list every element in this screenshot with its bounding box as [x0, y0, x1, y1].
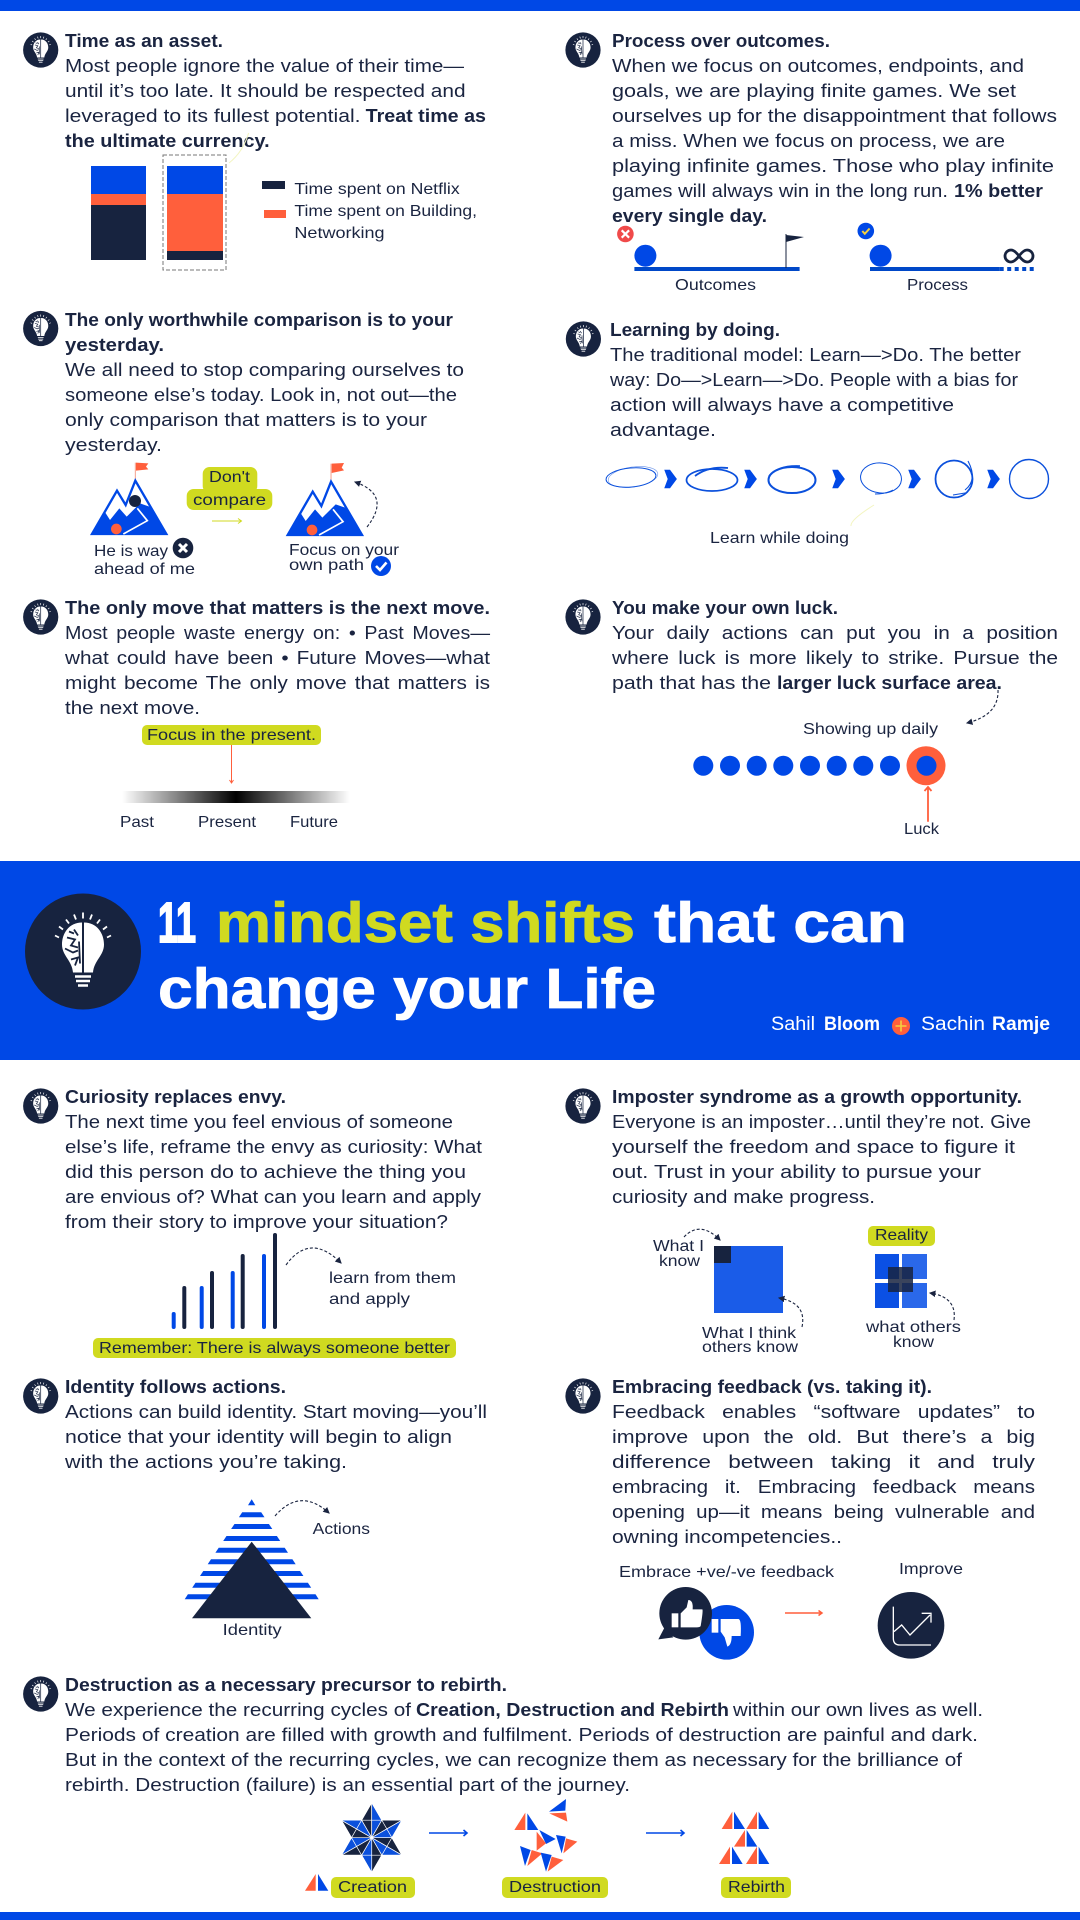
body text: feedback: embracing it. Embracing feedback means [612, 1476, 1035, 1497]
caption: identity: Identity [223, 1622, 282, 1639]
body text: process: every single day. [612, 205, 767, 226]
legend: Time spent on Building, [294, 203, 477, 220]
panel: the next move [23, 597, 491, 831]
arrow: dashed to learn [286, 1248, 341, 1265]
body text: learning [609, 344, 1021, 440]
body text: identity: Actions can build identity. Start moving—you’ll [65, 1401, 487, 1422]
icon: lightbulb badge [23, 1378, 58, 1414]
diagram: sketched circles improving [605, 460, 1048, 498]
body text: feedback: Feedback enables “software updates” to [612, 1401, 1035, 1422]
arrow: creation to destruction [429, 1830, 467, 1836]
body text: next move [64, 622, 491, 718]
body text: process: playing infinite games. Those who play infinite [612, 155, 1054, 176]
diagram: reality squares [865, 1226, 961, 1351]
icon: growth chart [878, 1592, 944, 1659]
body text: learning: advantage. [610, 419, 716, 440]
icon: lightbulb badge [565, 32, 601, 68]
arrow: feedback to improve [785, 1610, 822, 1616]
diagram: reality squares: know [893, 1334, 934, 1351]
heading: imposter: Imposter syndrome as a growth opportunity. [612, 1086, 1022, 1107]
bar chart: rising lines [174, 1235, 275, 1327]
top bar [0, 0, 1080, 11]
body text: luck: where luck is more likely to strike. Pursue the [611, 647, 1058, 668]
label: rebirth: Rebirth [728, 1879, 785, 1896]
body text: destruction: Periods of creation are filled with growth and fulfilment. Periods of destruction are painful and dark. [65, 1724, 978, 1745]
body text: feedback: owning incompetencies.. [612, 1526, 842, 1547]
body text: luck: path that has the [612, 672, 771, 693]
dots chart: luck surface [693, 746, 946, 785]
authors [771, 1014, 1050, 1035]
body text: process: 1% better [954, 180, 1043, 201]
panel: time as an asset [23, 30, 486, 270]
body text: time: until it’s too late. It should be respected and [65, 80, 466, 101]
legend: Networking [294, 225, 385, 242]
body text: process: goals, we are playing finite games. We set [612, 80, 1016, 101]
callout: don't compare [187, 467, 272, 524]
diagram: outcomes track [617, 226, 804, 294]
body text: time [65, 55, 486, 151]
icon: lightbulb badge [565, 599, 601, 635]
caption: showing up daily: Showing up daily [803, 721, 938, 738]
authors: Ramje [992, 1014, 1050, 1035]
diagram: what I know square [653, 1229, 803, 1356]
heading: luck: You make your own luck. [612, 597, 838, 618]
caption: embrace feedback: Embrace +ve/-ve feedback [619, 1564, 835, 1581]
arrow: destruction to rebirth [646, 1830, 684, 1836]
icon: lightbulb badge [23, 599, 58, 635]
body text: imposter: out. Trust in your ability to pursue your [612, 1161, 981, 1182]
legend [262, 181, 477, 242]
heading: identity: Identity follows actions. [65, 1376, 286, 1397]
diagram: what I know square: others know [702, 1339, 798, 1356]
caption: learn from them: learn from them [329, 1270, 456, 1287]
icon: lightbulb badge [566, 321, 601, 357]
body text: identity: notice that your identity will begin to align [65, 1426, 452, 1447]
body text: comparison: someone else’s today. Look in, not out—the [65, 384, 457, 405]
heading: learning by doing: Learning by doing. [610, 319, 780, 340]
bottom bar [0, 1912, 1080, 1920]
body text: curiosity: else’s life, reframe the envy as curiosity: What [65, 1136, 482, 1157]
arrow: dashed to actions [275, 1501, 329, 1516]
caption: he is way ahead of me: ahead of me [94, 561, 195, 578]
banner [0, 861, 1080, 1060]
body text: imposter [612, 1111, 1031, 1207]
title: 11 [158, 891, 196, 955]
heading: time as an asset: Time as an asset. [65, 30, 223, 51]
panel: identity follows actions [23, 1376, 487, 1639]
body text: curiosity: from their story to improve your situation? [65, 1211, 448, 1232]
timeline labels: Past [120, 814, 155, 831]
body text: time: Treat time as [366, 105, 486, 126]
caption: focus on your own path: Focus on your [289, 542, 400, 559]
timeline gradient bar [122, 791, 350, 803]
caption: learn while doing [710, 505, 874, 547]
icon: lightbulb badge [565, 1088, 601, 1124]
panel: imposter syndrome [565, 1086, 1031, 1356]
body text: feedback [612, 1401, 1036, 1547]
title: that can [654, 891, 907, 955]
caption: he is way ahead of me [94, 538, 195, 578]
label: destruction: Destruction [509, 1879, 601, 1896]
title: change your Life [158, 957, 656, 1021]
heading: comparison [65, 309, 453, 355]
legend: Time spent on Netflix [294, 181, 460, 198]
body text: destruction: Creation, Destruction and Rebirth [416, 1699, 729, 1720]
arrow: down to present [230, 745, 234, 783]
body text: comparison [65, 359, 464, 455]
icon: thumbs up and down [658, 1587, 754, 1660]
body text: imposter: yourself the freedom and space to figure it [612, 1136, 1015, 1157]
timeline labels [120, 814, 338, 831]
icon: creation star [341, 1803, 402, 1873]
body text: time: the ultimate currency. [65, 130, 270, 151]
heading: destruction: Destruction as a necessary precursor to rebirth. [65, 1674, 507, 1695]
authors: Sachin [921, 1014, 985, 1035]
body text: process: ourselves up for the disappointment that follows [612, 105, 1057, 126]
caption: focus on your own path [289, 542, 400, 576]
heading: process over outcomes: Process over outcomes. [612, 30, 830, 51]
body text: next move: might become The only move that matters is [65, 672, 490, 693]
panel: curiosity replaces envy [23, 1086, 482, 1358]
body text: curiosity: did this person do to achieve the thing you [65, 1161, 466, 1182]
icon: lightbulb badge [23, 1676, 58, 1712]
body text: feedback: difference between taking it and truly [612, 1451, 1036, 1472]
arrow: dashed climb [355, 482, 377, 527]
caption: learn from them: and apply [329, 1291, 410, 1308]
illustration: mountain with rival [91, 463, 167, 534]
body text: imposter: curiosity and make progress. [612, 1186, 875, 1207]
heading: comparison: yesterday. [65, 334, 164, 355]
body text: learning: action will always have a competitive [610, 394, 954, 415]
label: creation: Creation [338, 1879, 407, 1896]
authors: Bloom [824, 1014, 880, 1035]
stacked bar chart: time spent [91, 133, 249, 270]
body text: destruction: rebirth. Destruction (failure) is an essential part of the journey. [65, 1774, 630, 1795]
label: rebirth [721, 1877, 791, 1898]
icon: creation unit triangles [305, 1874, 328, 1891]
body text: time: leveraged to its fullest potential. [65, 105, 360, 126]
caption: he is way ahead of me: He is way [94, 543, 168, 560]
panel: destruction and rebirth [23, 1674, 983, 1898]
pyramid: identity core [192, 1542, 311, 1618]
body text: process: When we focus on outcomes, endpoints, and [612, 55, 1024, 76]
caption: focus on your own path: own path [289, 557, 364, 574]
diagram: what I know square: know [659, 1253, 700, 1270]
callout: don't compare: Don't [209, 469, 251, 486]
heading: comparison: The only worthwhile comparison is to your [65, 309, 453, 330]
body text: destruction [65, 1699, 983, 1795]
callout: don't compare: compare [193, 492, 266, 509]
label: creation [331, 1877, 415, 1898]
arrows: chevrons between circles [664, 470, 1000, 488]
heading: the next move: The only move that matters is the next move. [65, 597, 490, 618]
icon: lightbulb badge [565, 1378, 601, 1414]
authors: Sahil [771, 1014, 815, 1035]
body text: comparison: yesterday. [65, 434, 162, 455]
icon: large lightbulb badge [25, 894, 141, 1010]
body text: identity: with the actions you’re taking. [64, 1451, 347, 1472]
body text: next move: the next move. [65, 697, 200, 718]
diagram: process track [858, 223, 1035, 294]
body text: next move: what could have been • Future Moves—what [64, 647, 490, 668]
body text: curiosity [65, 1111, 482, 1232]
body text: next move: Most people waste energy on: • Past Moves— [65, 622, 491, 643]
caption: luck: Luck [904, 821, 940, 838]
callout: remember: Remember: There is always someone better [99, 1340, 451, 1357]
panel: embracing feedback [565, 1376, 1036, 1660]
body text: destruction: But in the context of the recurring cycles, we can recognize them as necessary for the brilliance of [65, 1749, 963, 1770]
body text: curiosity: are envious of? What can you learn and apply [65, 1186, 482, 1207]
body text: destruction: We experience the recurring cycles of [65, 1699, 412, 1720]
callout: focus in the present: Focus in the present. [147, 727, 316, 744]
icon: lightbulb badge [23, 311, 58, 346]
body text: imposter: Everyone is an imposter…until they’re not. Give [612, 1111, 1031, 1132]
body text: curiosity: The next time you feel envious of someone [65, 1111, 453, 1132]
body text: destruction: within our own lives as well. [732, 1699, 983, 1720]
body text: learning: way: Do—>Learn—>Do. People with a bias for [609, 369, 1018, 390]
diagram: process track: Process [907, 277, 968, 294]
pyramid: striped actions [185, 1499, 319, 1599]
caption: learn while doing: Learn while doing [710, 530, 849, 547]
body text: process [612, 55, 1057, 226]
timeline labels: Present [198, 814, 257, 831]
diagram: reality squares: Reality [875, 1227, 928, 1244]
diagram: what I know square: What I [653, 1238, 704, 1255]
body text: comparison: only comparison that matters is to your [65, 409, 427, 430]
body text: process: a miss. When we focus on process, we are [612, 130, 1005, 151]
arrow: dashed to showing up daily [967, 690, 998, 723]
body text: comparison: We all need to stop comparing ourselves to [65, 359, 464, 380]
heading: curiosity: Curiosity replaces envy. [65, 1086, 286, 1107]
diagram: outcomes track: Outcomes [675, 277, 756, 294]
caption: actions: Actions [313, 1521, 370, 1538]
title: mindset shifts [216, 891, 635, 955]
title [158, 891, 907, 1021]
timeline labels: Future [290, 814, 338, 831]
body text: learning: The traditional model: Learn—>Do. The better [610, 344, 1021, 365]
body text: time: Most people ignore the value of their time— [65, 55, 465, 76]
illustration: mountain own path [287, 463, 363, 535]
heading: feedback: Embracing feedback (vs. taking it). [612, 1376, 932, 1397]
body text: luck: Your daily actions can put you in a position [612, 622, 1058, 643]
body text: feedback: improve upon the old. But there’s a big [612, 1426, 1035, 1447]
icon: lightbulb badge [23, 1088, 58, 1124]
caption: learn from them [329, 1270, 456, 1308]
body text: identity [64, 1401, 487, 1472]
panel: process over outcomes [565, 30, 1057, 294]
diagram: what I know square: What I think [702, 1325, 797, 1342]
icon: rebuilt triangles [719, 1812, 769, 1864]
body text: process: games will always win in the long run. [612, 180, 948, 201]
label: destruction [502, 1877, 608, 1898]
panel: learning by doing [566, 319, 1048, 547]
caption: improve: Improve [899, 1561, 963, 1578]
body text: luck: larger luck surface area. [777, 672, 1002, 693]
panel: comparison [23, 309, 464, 578]
panel: make your own luck [565, 597, 1058, 838]
icon: lightbulb badge [23, 32, 58, 68]
diagram: reality squares: what others [865, 1319, 961, 1336]
arrow: up to luck dot [924, 787, 932, 822]
body text: feedback: opening up—it means being vulnerable and [612, 1501, 1035, 1522]
icon: scattered triangles [514, 1799, 577, 1872]
body text: luck [611, 622, 1058, 693]
